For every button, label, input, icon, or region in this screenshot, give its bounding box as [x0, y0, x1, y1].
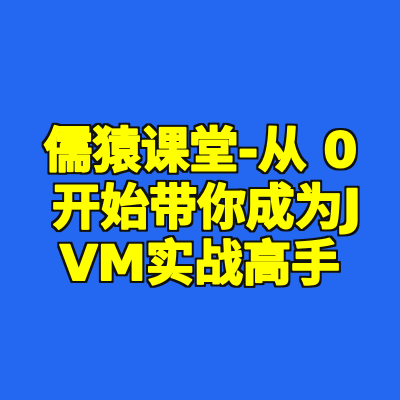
title line 1: 儒猿课堂-从 0	[44, 123, 357, 179]
title line 3: VM实战高手	[60, 236, 340, 292]
title	[44, 123, 361, 292]
title line 2: 开始带你成为J	[52, 180, 361, 236]
